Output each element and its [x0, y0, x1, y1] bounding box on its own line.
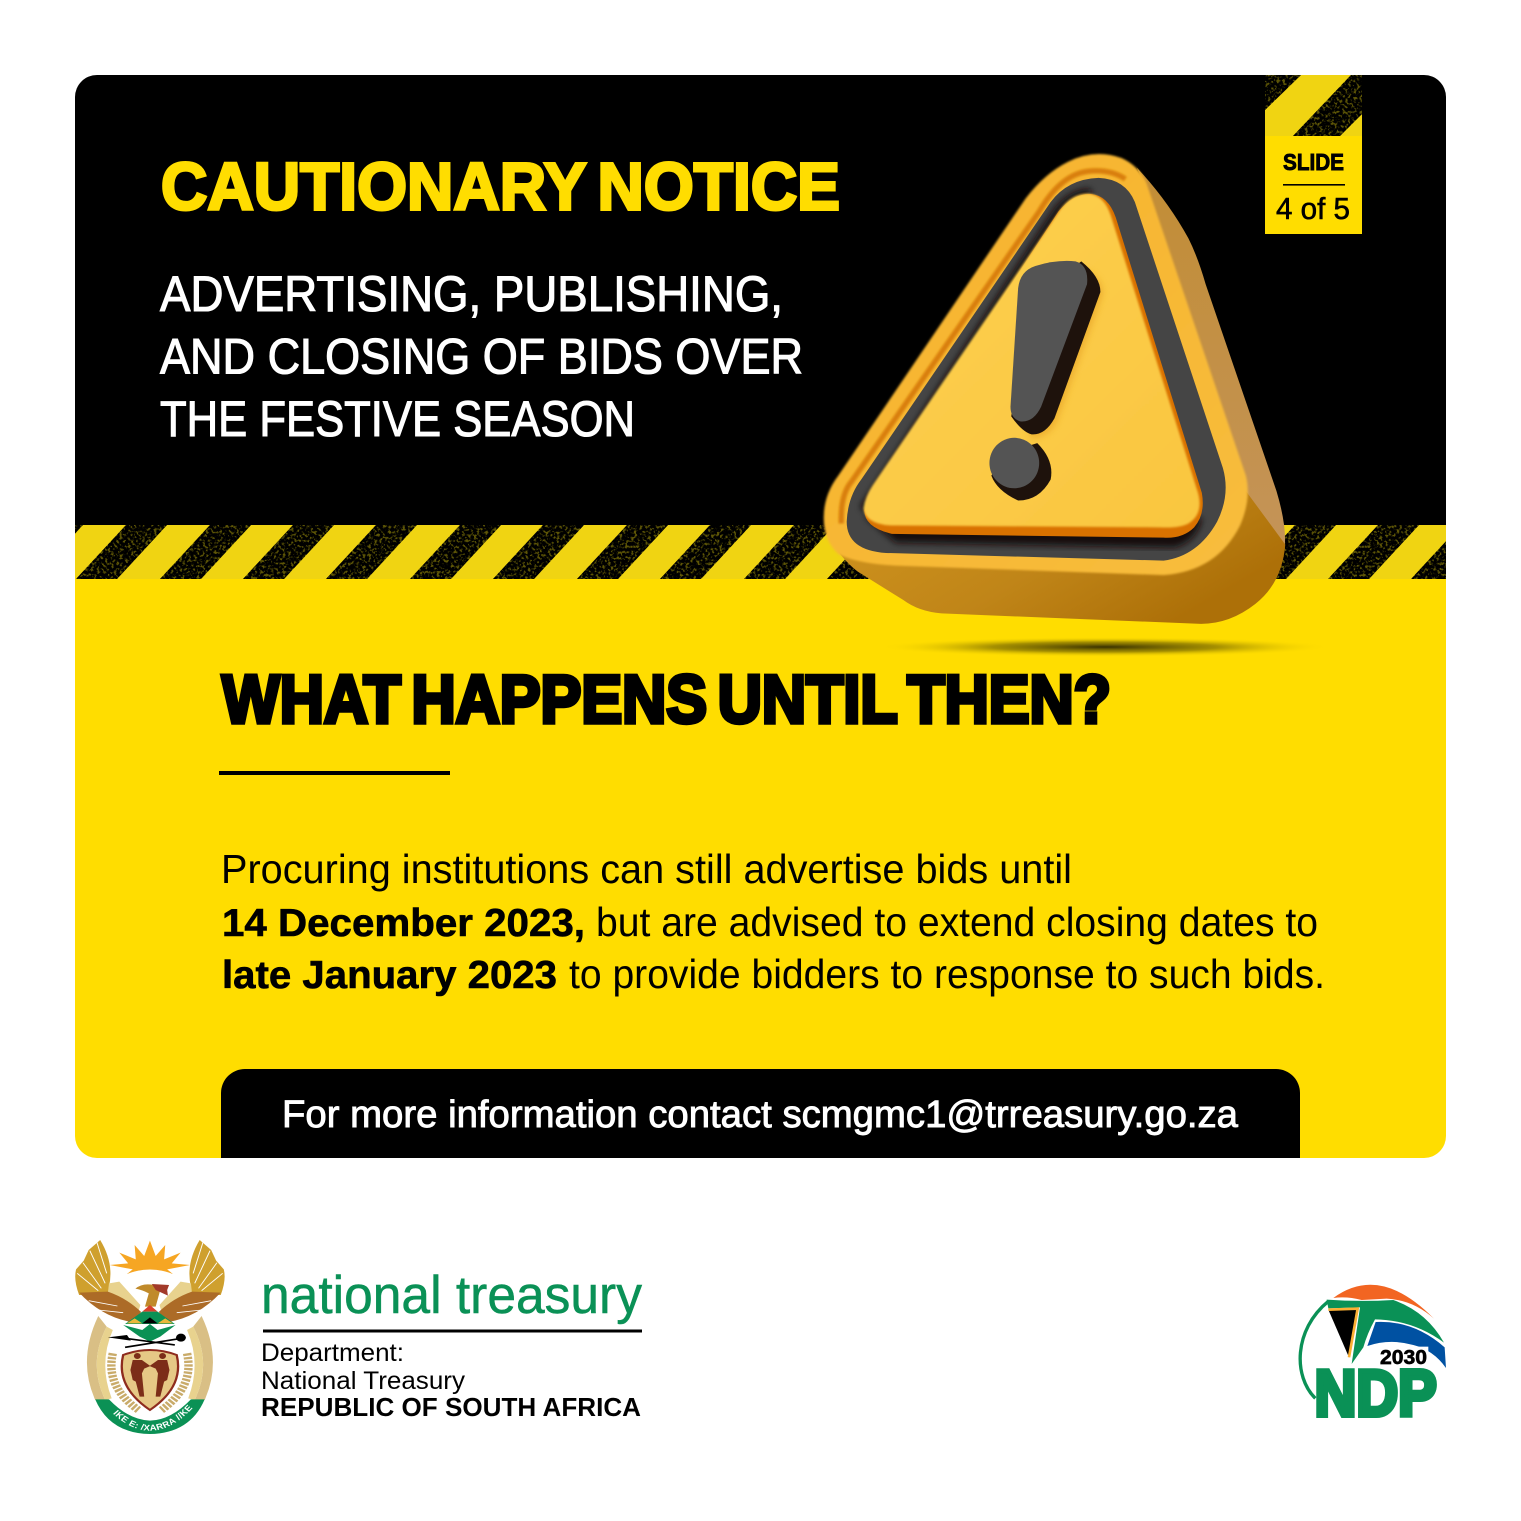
badge count: 4 of 5 — [1276, 191, 1350, 226]
body paragraph: Procuring institutions can still advertise bids until — [221, 846, 1072, 892]
protea leaves — [123, 1324, 176, 1342]
spear and knobkierie — [108, 1334, 186, 1347]
shield — [122, 1350, 178, 1410]
badge base — [1265, 136, 1362, 234]
yellow triangle edge — [1328, 1309, 1358, 1357]
icon: 3D warning triangle — [824, 154, 1285, 624]
contact bar — [221, 1069, 1300, 1159]
black triangle — [1328, 1309, 1358, 1357]
contact text: For more information contact scmgmc1@trreasury.go.za — [282, 1094, 1239, 1136]
body paragraph: but are advised to extend closing dates to — [596, 899, 1318, 945]
exclamation dot side — [991, 443, 1051, 501]
wordmark name: national treasury — [261, 1266, 642, 1325]
triangle lower body — [827, 491, 1285, 624]
figures — [134, 1353, 141, 1359]
subtitle: AND CLOSING OF BIDS OVER — [160, 328, 803, 384]
logo: national treasury wordmark: National Treasury — [261, 1367, 466, 1395]
badge label: SLIDE — [1283, 149, 1344, 175]
green ring — [1300, 1301, 1328, 1398]
exclamation shadow — [1030, 269, 1102, 438]
green flag band — [1327, 1300, 1444, 1364]
body paragraph: to provide bidders to response to such bids. — [569, 951, 1325, 997]
exclamation bar face — [1010, 261, 1087, 421]
secretary bird — [135, 1284, 169, 1307]
notice card — [0, 75, 1502, 1159]
logo: national treasury wordmark — [261, 1266, 642, 1422]
right wing — [159, 1240, 225, 1322]
icon: ground shadow — [880, 637, 1330, 657]
rim groove — [841, 171, 1125, 523]
NDP letters: NDP — [1315, 1356, 1437, 1429]
title: cautionary notice: CAUTIONARY NOTICE — [161, 150, 840, 224]
plate orange edge — [864, 194, 1203, 538]
tusks — [87, 1316, 107, 1400]
hazard stripe band — [0, 525, 1502, 579]
logo: coat of arms — [75, 1240, 225, 1434]
motto text: IKE E: /XARRA //KE — [113, 1404, 192, 1431]
left wing — [75, 1240, 141, 1322]
sun — [110, 1241, 190, 1274]
diamond — [125, 1305, 175, 1324]
2030 label: 2030 — [1380, 1346, 1427, 1369]
triangle front rim — [824, 154, 1248, 575]
subtitle: THE FESTIVE SEASON — [160, 391, 635, 447]
exclamation dot face — [989, 438, 1039, 488]
orange arc — [1333, 1285, 1434, 1319]
triangle dark recess — [847, 178, 1226, 561]
panel: black header — [75, 75, 1446, 526]
heading underline — [219, 771, 450, 775]
recess inner shadow — [864, 194, 1202, 548]
body paragraph: late January 2023 — [222, 954, 557, 997]
logo: national treasury wordmark: REPUBLIC OF SOUTH AFRICA — [261, 1392, 641, 1422]
wheat — [111, 1353, 138, 1410]
triangle side wall — [1137, 168, 1285, 568]
triangle inner plate — [864, 194, 1200, 528]
department lines: Department: — [261, 1339, 404, 1367]
motto banner — [95, 1399, 205, 1434]
heading: what happens until then: WHAT HAPPENS UNTIL THEN? — [222, 662, 1111, 738]
subtitle — [160, 266, 803, 447]
blue band — [1367, 1322, 1446, 1368]
body paragraph: 14 December 2023, — [222, 902, 585, 945]
logo: NDP 2030 — [1300, 1285, 1446, 1429]
panel: yellow body — [75, 579, 1446, 1159]
subtitle: ADVERTISING, PUBLISHING, — [160, 266, 783, 322]
badge stripes — [1265, 75, 1362, 136]
exclamation bar side — [1011, 261, 1100, 434]
slide badge — [1265, 75, 1362, 234]
body paragraph — [221, 846, 1325, 997]
